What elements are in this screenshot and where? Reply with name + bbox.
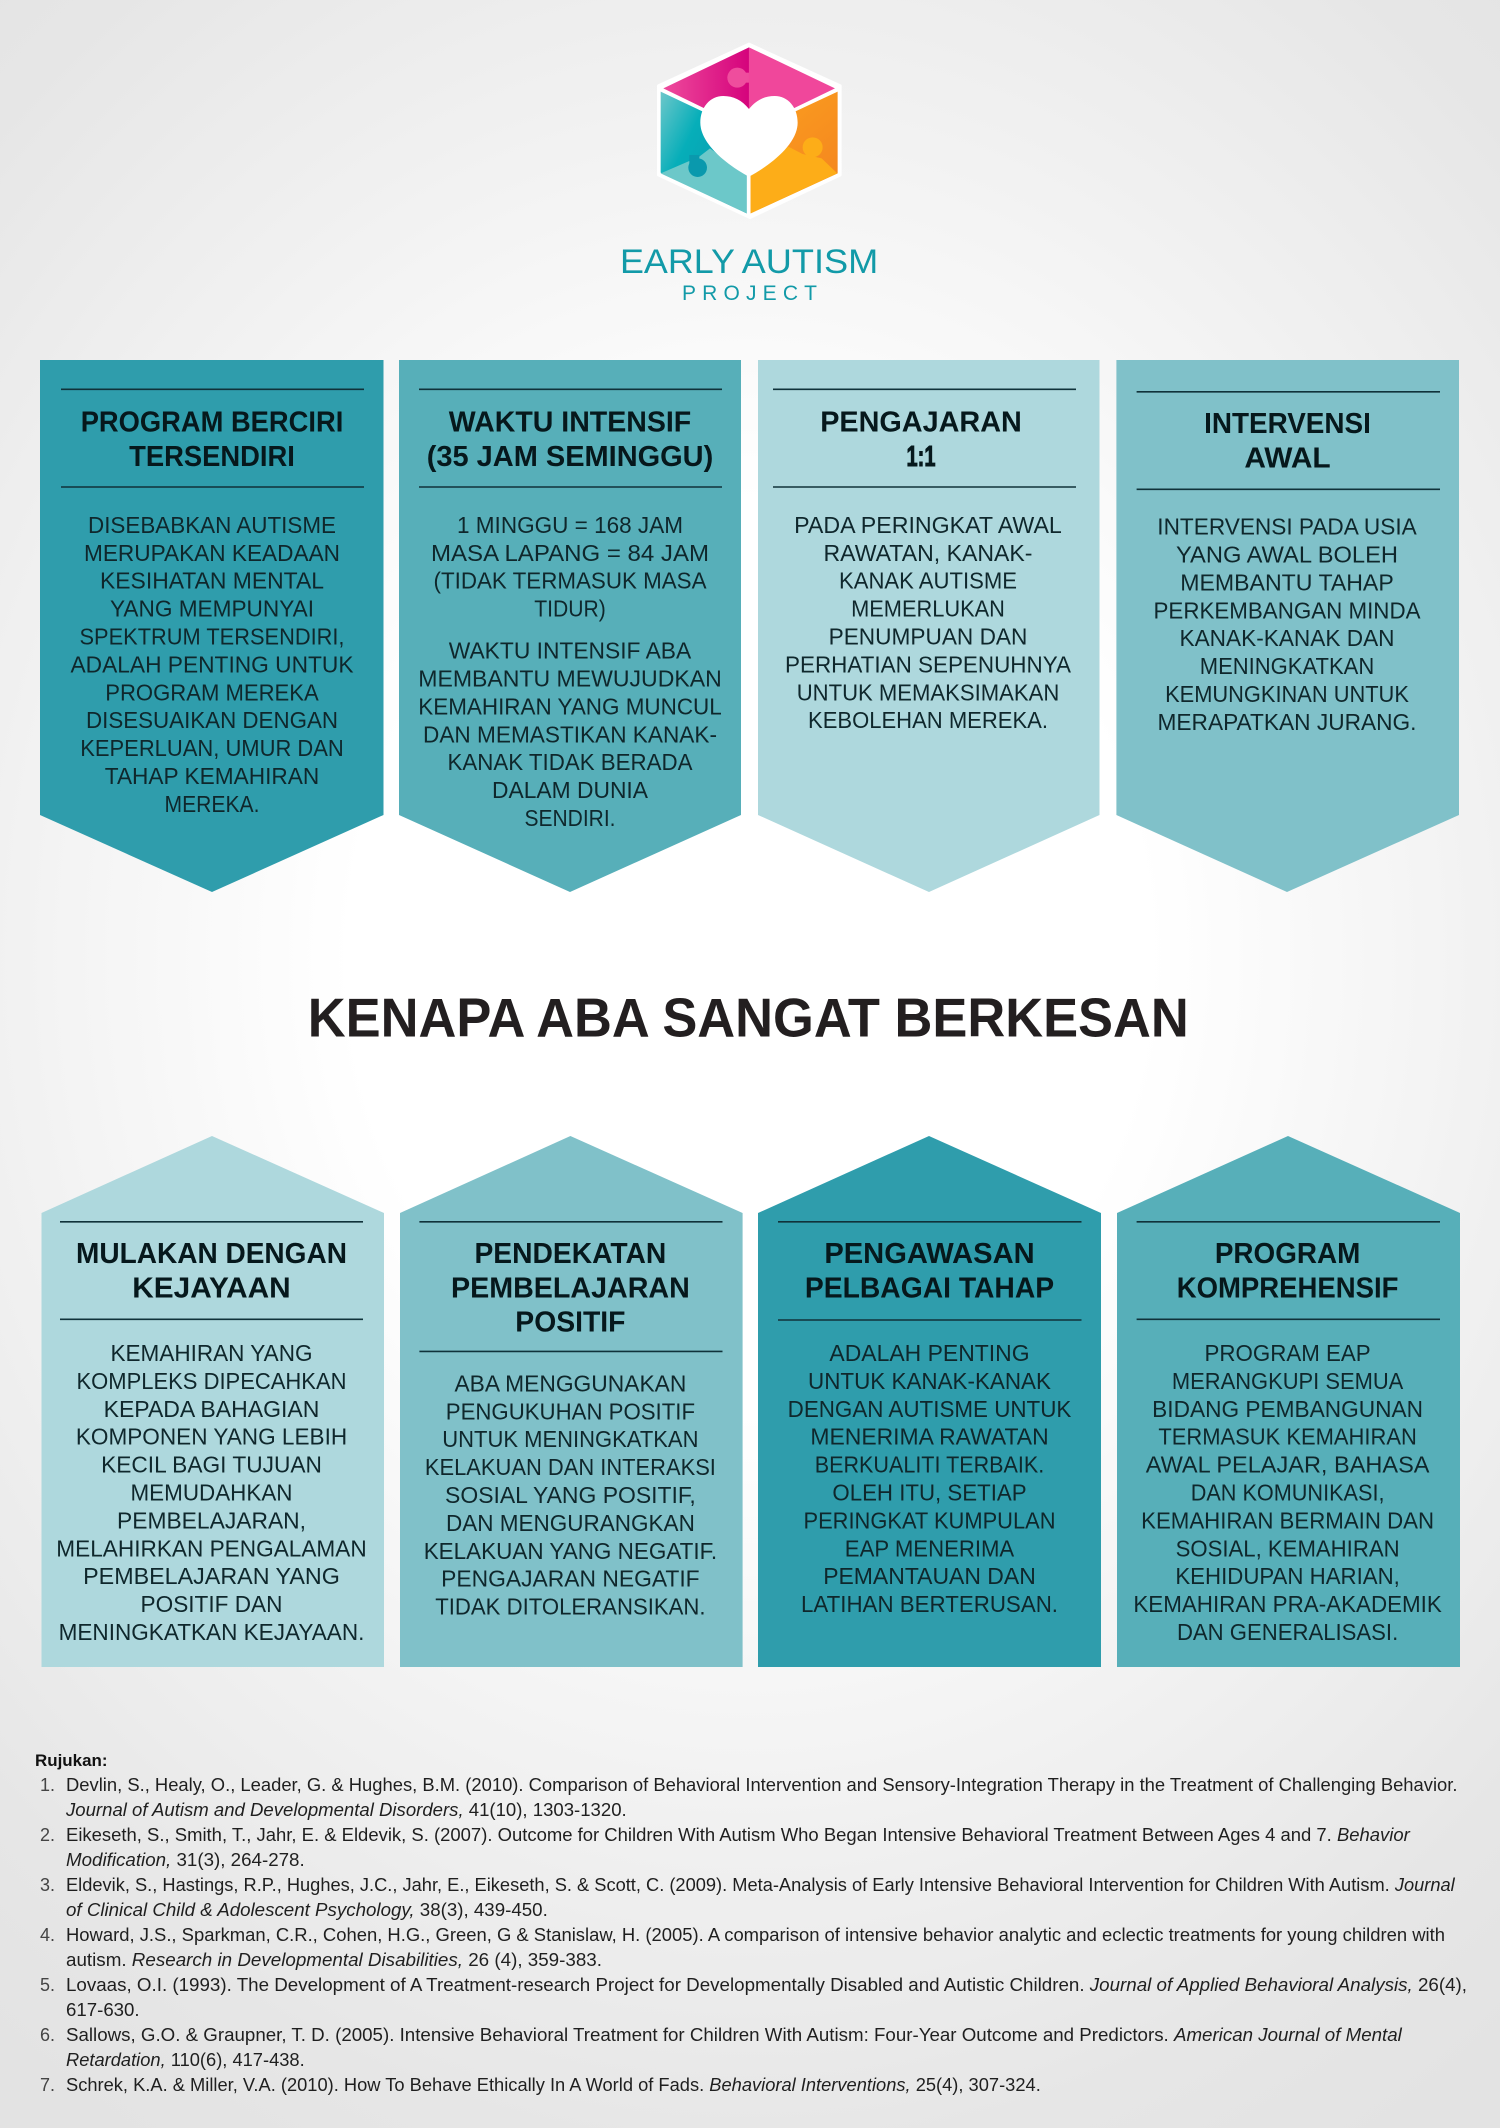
logo wordmark: EARLY <box>620 243 735 281</box>
references heading: Rujukan: <box>35 1751 108 1770</box>
panel body text: DAN KOMUNIKASI, <box>1191 1480 1384 1506</box>
reference 5 <box>40 1975 1467 2020</box>
panel body text: SPEKTRUM TERSENDIRI, <box>80 624 344 650</box>
panel body text: DISESUAIKAN DENGAN <box>86 707 338 733</box>
panel body text: PERINGKAT KUMPULAN <box>804 1507 1056 1533</box>
panel body text: TAHAP KEMAHIRAN <box>105 763 319 789</box>
icon: puzzle hexagon with heart <box>658 44 840 218</box>
panel body text: DAN MEMASTIKAN KANAK- <box>423 721 717 747</box>
panel heading <box>60 1222 363 1319</box>
panel body text: KEPADA BAHAGIAN <box>104 1396 319 1422</box>
panel body text: PEMBELAJARAN YANG <box>83 1563 340 1589</box>
panel body text: SOSIAL, KEMAHIRAN <box>1176 1535 1400 1561</box>
panel heading: PROGRAM BERCIRI <box>81 406 343 438</box>
panel body text <box>424 1370 717 1620</box>
panel body text: DENGAN AUTISME UNTUK <box>788 1396 1072 1422</box>
panel body text: DAN GENERALISASI. <box>1177 1619 1398 1645</box>
panel body text: PENGUKUHAN POSITIF <box>446 1398 695 1424</box>
reference 3: 3. <box>40 1875 55 1895</box>
panel body text: UNTUK MENINGKATKAN <box>442 1426 699 1452</box>
panel body text: PENGAJARAN NEGATIF <box>441 1566 700 1592</box>
panel body text: MEMUDAHKAN <box>130 1480 292 1506</box>
panel heading: WAKTU INTENSIF <box>449 406 691 438</box>
panel body text: MASA LAPANG = 84 JAM <box>431 540 709 566</box>
panel: Mulakan Dengan Kejayaan <box>42 1136 384 1667</box>
panel body text: MELAHIRKAN PENGALAMAN <box>56 1535 367 1561</box>
logo wordmark <box>620 243 878 281</box>
panel body text: MEMBANTU MEWUJUDKAN <box>418 666 722 692</box>
panel body text: UNTUK MEMAKSIMAKAN <box>797 679 1059 705</box>
panel body text: MEMBANTU TAHAP <box>1180 569 1394 595</box>
panel body text: KELAKUAN YANG NEGATIF. <box>424 1538 717 1564</box>
panel body text: ABA MENGGUNAKAN <box>454 1370 686 1396</box>
panel body text <box>785 512 1072 733</box>
reference 1: 1. <box>40 1775 55 1795</box>
panel body text: KEMAHIRAN BERMAIN DAN <box>1141 1507 1434 1533</box>
panel body text: PROGRAM EAP <box>1204 1340 1371 1366</box>
reference 3: of Clinical Child & Adolescent Psychology, 38(3), 439-450. <box>66 1900 548 1920</box>
panel heading: AWAL <box>1244 442 1331 474</box>
panel shape <box>1117 1136 1460 1667</box>
panel body text: EAP MENERIMA <box>845 1535 1015 1561</box>
panel body text: DISEBABKAN AUTISME <box>88 512 336 538</box>
panel body text: PERKEMBANGAN MINDA <box>1154 597 1421 623</box>
panel heading: TERSENDIRI <box>129 441 295 473</box>
panel body text: PEMBELAJARAN, <box>117 1507 306 1533</box>
panel body text <box>788 1340 1072 1617</box>
logo: Early Autism Project <box>620 44 878 305</box>
panel body text: MENERIMA RAWATAN <box>810 1424 1049 1450</box>
panel heading <box>1137 392 1440 489</box>
panel: Pengawasan Pelbagai Tahap <box>758 1136 1101 1667</box>
reference 3 <box>40 1875 1456 1920</box>
panel heading: PENGAWASAN <box>824 1238 1035 1270</box>
reference 1: Journal of Autism and Developmental Disorders, 41(10), 1303-1320. <box>65 1800 627 1820</box>
panel heading: KOMPREHENSIF <box>1177 1272 1398 1304</box>
panel: Program Komprehensif <box>1117 1136 1460 1667</box>
panel heading <box>61 389 364 487</box>
panel body text: LATIHAN BERTERUSAN. <box>801 1591 1058 1617</box>
panel body text: KANAK TIDAK BERADA <box>448 749 693 775</box>
panel body text <box>70 512 354 817</box>
panel heading <box>773 389 1076 487</box>
panel body text: RAWATAN, KANAK- <box>824 540 1032 566</box>
panel body text: KELAKUAN DAN INTERAKSI <box>425 1454 716 1480</box>
reference 2: Eikeseth, S., Smith, T., Jahr, E. & Eldevik, S. (2007). Outcome for Children With Autism Who Began Intensive Behavioral Treatment Between Ages 4 and 7. Behavior <box>66 1825 1411 1845</box>
reference 2: Modification, 31(3), 264-278. <box>66 1850 305 1870</box>
panel body text: ADALAH PENTING UNTUK <box>70 651 354 677</box>
panel body text: KANAK-KANAK DAN <box>1180 625 1394 651</box>
panel body text: PROGRAM MEREKA <box>105 679 319 705</box>
panel heading: PROGRAM <box>1215 1238 1360 1270</box>
reference 4 <box>40 1925 1445 1970</box>
panel body text: TERMASUK KEMAHIRAN <box>1158 1424 1417 1450</box>
reference 2: 2. <box>40 1825 55 1845</box>
panel body text: KEMAHIRAN PRA-AKADEMIK <box>1133 1591 1442 1617</box>
panel body text: INTERVENSI PADA USIA <box>1157 514 1417 540</box>
panel body text: SOSIAL YANG POSITIF, <box>445 1482 696 1508</box>
reference 1 <box>40 1775 1458 1820</box>
panel heading: PEMBELAJARAN <box>451 1272 690 1304</box>
panel body text: OLEH ITU, SETIAP <box>832 1480 1027 1506</box>
panel body text: MERANGKUPI SEMUA <box>1172 1368 1404 1394</box>
panel body text: MEREKA. <box>164 791 260 817</box>
panel: Waktu Intensif <box>399 360 741 892</box>
panel body text: PADA PERINGKAT AWAL <box>794 512 1062 538</box>
panel body text: KEBOLEHAN MEREKA. <box>808 707 1048 733</box>
reference 4: Howard, J.S., Sparkman, C.R., Cohen, H.G., Green, G & Stanislaw, H. (2005). A comparison of intensive behavior analytic and eclectic treatments for young children with <box>66 1925 1445 1945</box>
panel heading: PENDEKATAN <box>474 1238 666 1270</box>
panel heading <box>419 1222 722 1351</box>
reference 1: Devlin, S., Healy, O., Leader, G. & Hughes, B.M. (2010). Comparison of Behavioral Intervention and Sensory-Integration Therapy in the Treatment of Challenging Behavior. <box>66 1775 1458 1795</box>
panel body text: KEMAHIRAN YANG MUNCUL <box>418 693 722 719</box>
reference 6: 6. <box>40 2025 55 2045</box>
panel body text: 1 MINGGU = 168 JAM <box>457 512 683 538</box>
panel heading: PELBAGAI TAHAP <box>805 1272 1054 1304</box>
reference 3: Eldevik, S., Hastings, R.P., Hughes, J.C., Jahr, E., Eikeseth, S. & Scott, C. (2009). Meta-Analysis of Early Intensive Behavioral Intervention for Children With Autism. Journal <box>66 1875 1456 1895</box>
reference 6: Sallows, G.O. & Graupner, T. D. (2005). Intensive Behavioral Treatment for Children With Autism: Four-Year Outcome and Predictors. American Journal of Mental <box>66 2025 1403 2045</box>
reference 6 <box>40 2025 1403 2070</box>
reference 5: 5. <box>40 1975 55 1995</box>
panel heading: KEJAYAAN <box>132 1272 291 1304</box>
panel body text: YANG AWAL BOLEH <box>1176 542 1398 568</box>
panel: Pengajaran 1:1 <box>758 360 1100 892</box>
reference 4: autism. Research in Developmental Disabilities, 26 (4), 359-383. <box>66 1950 602 1970</box>
panel: Program Berciri Tersendiri <box>40 360 384 892</box>
panel body text: KEHIDUPAN HARIAN, <box>1175 1563 1400 1589</box>
panel body text: KEMUNGKINAN UNTUK <box>1165 681 1410 707</box>
panel: Pendekatan Pembelajaran Positif <box>400 1136 743 1667</box>
panel body text: WAKTU INTENSIF ABA <box>449 638 692 664</box>
panel body text: KOMPLEKS DIPECAHKAN <box>76 1368 346 1394</box>
panel body text: MEMERLUKAN <box>851 596 1005 622</box>
panel body text: SENDIRI. <box>524 805 616 831</box>
panel heading: MULAKAN DENGAN <box>76 1238 347 1270</box>
panel body text: KECIL BAGI TUJUAN <box>101 1452 322 1478</box>
panel heading <box>419 389 722 487</box>
panel body text: UNTUK KANAK-KANAK <box>808 1368 1052 1394</box>
panel body text: DAN MENGURANGKAN <box>446 1510 695 1536</box>
panel body text: KESIHATAN MENTAL <box>100 568 324 594</box>
panel: Intervensi Awal <box>1116 360 1459 892</box>
panel body text: PEMANTAUAN DAN <box>823 1563 1036 1589</box>
logo wordmark: AUTISM <box>742 243 878 281</box>
panel heading <box>1137 1222 1440 1319</box>
panel body text: MERAPATKAN JURANG. <box>1158 709 1416 735</box>
panel heading: 1:1 <box>906 441 936 473</box>
panel body text <box>1133 1340 1442 1645</box>
panel body text: BIDANG PEMBANGUNAN <box>1152 1396 1423 1422</box>
panel body text: MENINGKATKAN <box>1200 653 1374 679</box>
panel shape <box>758 360 1100 892</box>
panel shape <box>399 360 741 892</box>
reference 5: Lovaas, O.I. (1993). The Development of A Treatment-research Project for Developmentally Disabled and Autistic Children. Journal of Applied Behavioral Analysis, 26(4), <box>66 1975 1467 1995</box>
panel heading: PENGAJARAN <box>820 406 1022 438</box>
panel body text: AWAL PELAJAR, BAHASA <box>1146 1452 1430 1478</box>
panel body text: MERUPAKAN KEADAAN <box>84 540 340 566</box>
panel body text: KEMAHIRAN YANG <box>110 1340 312 1366</box>
panel shape <box>40 360 384 892</box>
reference 4: 4. <box>40 1925 55 1945</box>
panel body text: POSITIF DAN <box>141 1591 282 1617</box>
logo subtitle: PROJECT <box>682 282 817 305</box>
panel body text: (TIDAK TERMASUK MASA <box>434 568 707 594</box>
panel body text: BERKUALITI TERBAIK. <box>815 1452 1044 1478</box>
reference 6: Retardation, 110(6), 417-438. <box>66 2050 305 2070</box>
panel shape <box>1116 360 1459 892</box>
panel body text: TIDAK DITOLERANSIKAN. <box>435 1594 706 1620</box>
panel heading: POSITIF <box>515 1306 626 1338</box>
panel heading: (35 JAM SEMINGGU) <box>427 441 713 473</box>
panel heading: INTERVENSI <box>1204 408 1371 440</box>
panel body text: DALAM DUNIA <box>492 777 649 803</box>
panel body text: YANG MEMPUNYAI <box>110 596 314 622</box>
panel body text: MENINGKATKAN KEJAYAAN. <box>59 1619 364 1645</box>
panel body text: PERHATIAN SEPENUHNYA <box>785 651 1072 677</box>
panel body text: KANAK AUTISME <box>839 568 1017 594</box>
reference 2 <box>40 1825 1411 1870</box>
panel body text: KOMPONEN YANG LEBIH <box>76 1424 347 1450</box>
main heading: KENAPA ABA SANGAT BERKESAN <box>308 987 1189 1049</box>
panel body text <box>418 512 722 831</box>
panel body text <box>56 1340 367 1645</box>
panel body text: PENUMPUAN DAN <box>829 624 1027 650</box>
panel shape <box>400 1136 743 1667</box>
reference 7: 7. <box>40 2075 55 2095</box>
panel heading <box>778 1222 1082 1320</box>
panel shape <box>42 1136 384 1667</box>
reference 7: Schrek, K.A. & Miller, V.A. (2010). How To Behave Ethically In A World of Fads. Behavioral Interventions, 25(4), 307-324. <box>66 2075 1041 2095</box>
reference 5: 617-630. <box>66 2000 140 2020</box>
panel body text: KEPERLUAN, UMUR DAN <box>80 735 344 761</box>
panel body text: ADALAH PENTING <box>829 1340 1030 1366</box>
panel shape <box>758 1136 1101 1667</box>
references block <box>35 1751 1467 2095</box>
panel body text <box>1154 514 1421 735</box>
panel body text: TIDUR) <box>534 596 606 622</box>
